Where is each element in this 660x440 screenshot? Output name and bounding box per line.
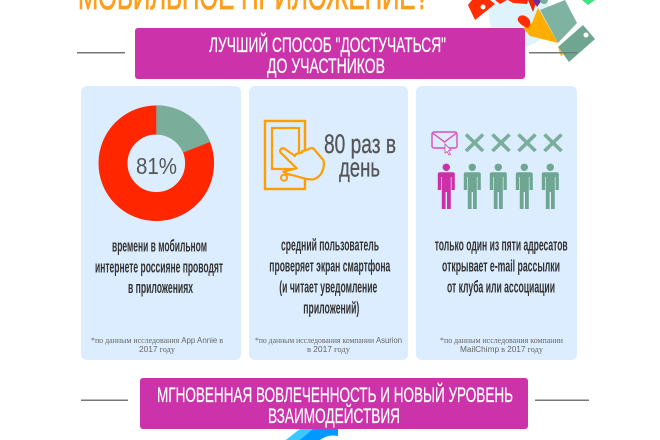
panel: one in five	[416, 86, 577, 360]
banner line left	[77, 52, 125, 54]
panel: 81 percent	[81, 86, 241, 360]
icon: person 4	[516, 164, 533, 209]
description text: проверяет экран смартфона	[269, 257, 391, 276]
footnote: MailChimp в 2017 году	[460, 345, 543, 354]
description text	[435, 236, 568, 296]
banner text line 2: ДО УЧАСТНИКОВ	[267, 54, 385, 78]
icon: hand tapping illustration	[468, 0, 595, 62]
icon: person 5	[542, 164, 559, 209]
footnote	[255, 336, 402, 354]
description text: средний пользователь	[281, 236, 379, 255]
icon: person 3	[490, 164, 507, 209]
description text: от клуба или ассоциации	[447, 277, 555, 296]
footnote: *по данным исследования App Annie в	[91, 336, 223, 345]
icon: phone with tapping hand	[265, 121, 324, 189]
icon: envelope with cursor	[432, 132, 457, 155]
banner line right	[529, 52, 577, 54]
footnote: *по данным исследования компании Asurion	[255, 336, 402, 345]
panel: 80 times a day	[249, 86, 408, 360]
icon: highlighted person	[438, 164, 455, 209]
description text: времени в мобильном	[112, 237, 207, 256]
banner text line 2: ВЗАИМОДЕЙСТВИЯ	[268, 403, 400, 428]
description text: в приложениях	[128, 278, 193, 297]
stat: 80 times: 80 раз в	[324, 129, 396, 159]
banner text line 1: ЛУЧШИЙ СПОСОБ "ДОСТУЧАТЬСЯ"	[209, 32, 446, 57]
banner line left	[81, 400, 128, 401]
description text: приложений)	[303, 298, 359, 317]
description text: интернете россияне проводят	[95, 258, 223, 276]
donut chart	[113, 105, 210, 207]
icon: person 2	[464, 164, 481, 209]
footnote: *по данным исследования компании	[440, 336, 564, 345]
donut value: 81%	[136, 153, 177, 179]
description text: (и читает уведомление	[279, 277, 377, 296]
footnote	[91, 336, 223, 354]
icons: crosses	[466, 134, 562, 151]
banner line right	[535, 400, 589, 401]
bottom icon: blue logo	[286, 429, 338, 440]
banner: best way to reach members	[135, 28, 525, 79]
footnote: в 2017 году	[307, 345, 350, 354]
stat: a day: день	[339, 153, 380, 183]
description text	[269, 236, 391, 317]
description text	[95, 237, 223, 297]
banner: instant engagement	[140, 378, 528, 429]
footnote	[440, 336, 564, 354]
footnote: 2017 году	[139, 345, 175, 354]
